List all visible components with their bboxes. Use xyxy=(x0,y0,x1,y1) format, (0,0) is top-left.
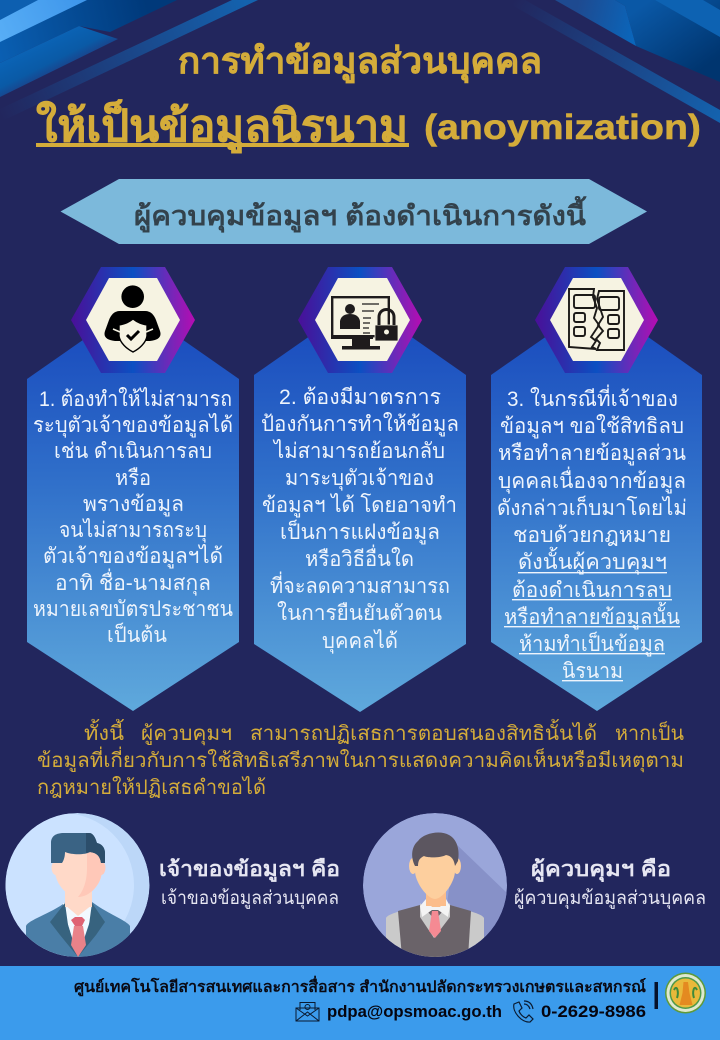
icon: phone xyxy=(514,1001,533,1022)
panel 2 xyxy=(254,301,466,712)
panel 1 text: เช่น ดำเนินการลบ xyxy=(54,440,212,463)
panel 3 text: ข้อมูลฯ ขอใช้สิทธิลบ xyxy=(500,414,684,439)
panel 2 text: ไม่สามารถย้อนกลับ xyxy=(272,439,445,463)
panel 1 text: หรือ xyxy=(115,467,151,490)
ministry logo xyxy=(665,972,706,1014)
data owner caption: เจ้าของข้อมูลฯ คือ xyxy=(159,857,340,883)
panel 3 text: นิรนาม xyxy=(562,660,623,683)
panel 1 text: ระบุตัวเจ้าของข้อมูลได้ xyxy=(33,413,233,438)
panel 2 text: 2. ต้องมีมาตรการ xyxy=(279,386,441,409)
panel 3 text: ดังนั้นผู้ควบคุมฯ xyxy=(518,547,667,575)
phone number: 0-2629-8986 xyxy=(541,1003,646,1021)
data owner caption xyxy=(159,857,340,910)
banner xyxy=(60,179,647,244)
note paragraph xyxy=(37,719,684,799)
title: ให้เป็นข้อมูลนิรนาม xyxy=(36,99,408,153)
icon badge 2: computer with padlock xyxy=(298,267,422,373)
panel 1 text: หมายเลขบัตรประชาชน xyxy=(33,598,233,621)
panel 2 text: ป้องกันการทำให้ข้อมูล xyxy=(261,412,459,437)
panel 3 xyxy=(491,301,702,711)
email address: pdpa@opsmoac.go.th xyxy=(327,1003,502,1021)
panel 2 text: ในการยืนยันตัวตน xyxy=(277,601,442,625)
panel 3 text xyxy=(497,384,687,683)
panel 1 text: อาทิ ชื่อ-นามสกุล xyxy=(55,568,211,596)
panel 1 text: พรางข้อมูล xyxy=(83,493,184,517)
note paragraph: ผู้ควบคุมฯ xyxy=(141,723,232,746)
panel 3 text: ชอบด้วยกฎหมาย xyxy=(513,524,671,547)
panel 3 text: บุคคลเนื่องจากข้อมูล xyxy=(498,466,686,494)
footer bar xyxy=(0,966,720,1040)
title: การทำข้อมูลส่วนบุคคล xyxy=(178,40,542,84)
icon: email envelope xyxy=(296,1002,319,1021)
icon badge 3: torn document xyxy=(535,267,658,373)
note paragraph: สามารถปฏิเสธการตอบสนองสิทธินั้นได้ xyxy=(250,719,597,745)
icon badge 1: person holding shield xyxy=(71,267,195,373)
panel 3 text: ต้องดำเนินการลบ xyxy=(512,579,672,602)
top-left corner decoration xyxy=(0,0,258,122)
panel 3 text: ดังกล่าวเก็บมาโดยไม่ xyxy=(497,494,687,520)
banner: ผู้ควบคุมข้อมูลฯ ต้องดำเนินการดังนี้ xyxy=(134,195,587,233)
panel 3 text: หรือทำลายข้อมูลนั้น xyxy=(504,602,680,630)
panel 2 text: ที่จะลดความสามารถ xyxy=(270,571,450,598)
panel 2 text: เป็นการแฝงข้อมูล xyxy=(280,518,440,545)
panel 1 text: ตัวเจ้าของข้อมูลฯได้ xyxy=(43,544,223,569)
panel 2 text: หรือวิธีอื่นใด xyxy=(305,544,414,571)
footer divider xyxy=(654,982,658,1009)
note paragraph: ข้อมูลที่เกี่ยวกับการใช้สิทธิเสรีภาพในการแสดงความคิดเห็นหรือมีเหตุตาม xyxy=(37,746,684,773)
panel 3 text: หรือทำลายข้อมูลส่วน xyxy=(498,442,686,466)
panel 3 text: 3. ในกรณีที่เจ้าของ xyxy=(507,384,678,411)
note paragraph: กฎหมายให้ปฏิเสธคำขอได้ xyxy=(37,776,266,799)
data controller caption xyxy=(514,857,706,910)
avatar: data owner xyxy=(0,813,150,957)
avatar: data controller xyxy=(363,813,507,957)
panel 2 text: มาระบุตัวเจ้าของ xyxy=(285,467,434,491)
note paragraph: หากเป็น xyxy=(615,720,684,745)
panel 2 text: บุคคลได้ xyxy=(322,629,398,654)
panel 1 xyxy=(27,305,239,711)
panel 1 text: 1. ต้องทำให้ไม่สามารถ xyxy=(39,387,232,411)
title: (anoymization) xyxy=(424,108,701,147)
top-right corner decoration xyxy=(503,0,720,123)
panel 3 text: ห้ามทำเป็นข้อมูล xyxy=(519,630,665,657)
data controller caption: ผู้ควบคุมข้อมูลส่วนบุคคล xyxy=(514,888,706,910)
note paragraph: ทั้งนี้ xyxy=(84,719,124,745)
panel 1 text: จนไม่สามารถระบุ xyxy=(59,518,207,543)
panel 1 text xyxy=(33,387,233,647)
title xyxy=(36,40,701,153)
panel 1 text: เป็นต้น xyxy=(107,621,167,647)
data controller caption: ผู้ควบคุมฯ คือ xyxy=(531,857,671,883)
panel 2 text: ข้อมูลฯ ได้ โดยอาจทำ xyxy=(262,493,457,518)
footer organisation name: ศูนย์เทคโนโลยีสารสนเทศและการสื่อสาร สำนักงานปลัดกระทรวงเกษตรและสหกรณ์ xyxy=(74,975,647,998)
panel 2 text xyxy=(261,386,459,654)
data owner caption: เจ้าของข้อมูลส่วนบุคคล xyxy=(161,888,339,910)
